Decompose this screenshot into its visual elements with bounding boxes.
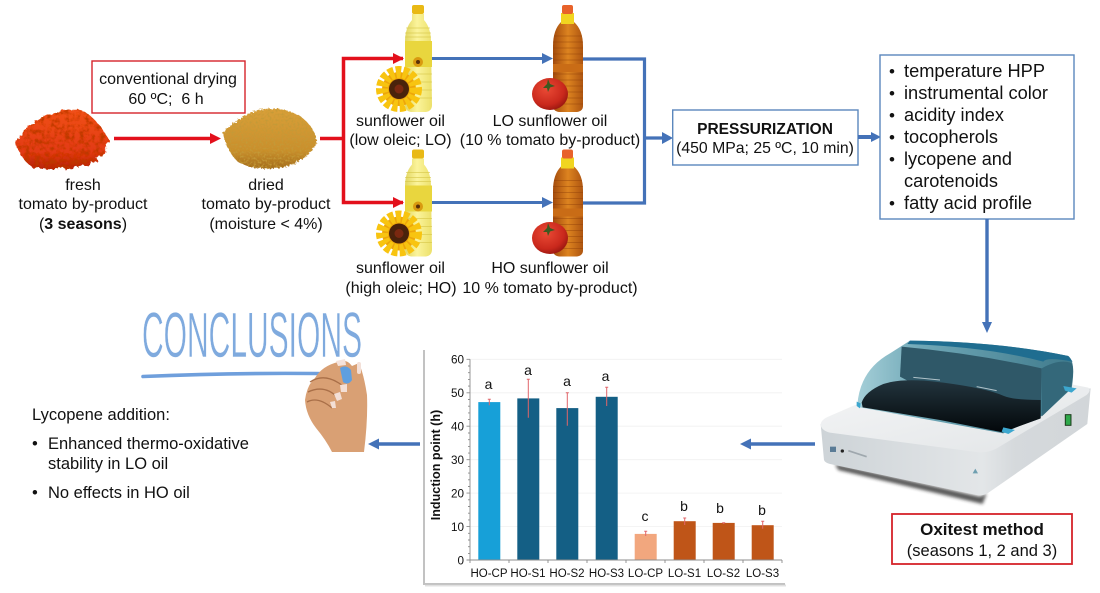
axes <box>466 359 782 563</box>
text: dried tomato by-product: dried <box>248 177 284 194</box>
text: conclusions list: No effects in HO oil <box>48 484 190 502</box>
text: HO sunflower oil <box>462 260 638 297</box>
bars: LO series <box>635 521 774 560</box>
arrow: blue bottom oil to HO <box>432 197 553 208</box>
error bars <box>488 379 764 536</box>
x category labels: HO-S2 <box>549 568 585 580</box>
box: pressurization: (450 MPa; 25 ºC, 10 min) <box>676 140 854 157</box>
box: analysis list: • <box>889 150 895 169</box>
text: dried tomato by-product <box>202 177 331 233</box>
text: conclusions list: • <box>32 484 38 502</box>
significance letters: a <box>602 368 610 384</box>
text: conclusions list <box>32 406 249 502</box>
text: conclusions list: Enhanced thermo-oxidative <box>48 435 249 453</box>
arrow: blue merge to pressurization <box>583 59 673 203</box>
box: analysis list: • <box>889 106 895 125</box>
significance letters: c <box>642 508 648 524</box>
icon: dried tomato by-product pile <box>223 108 317 169</box>
x category labels: LO-S2 <box>707 568 740 580</box>
icon: Oxitest instrument <box>821 341 1091 504</box>
label: Oxitest method: Oxitest method <box>920 520 1044 539</box>
box: analysis list: • <box>889 84 895 103</box>
text: conclusions list: stability in LO oil <box>48 455 168 473</box>
text: fresh tomato by-product: fresh <box>65 177 101 194</box>
x category labels: LO-CP <box>628 568 663 580</box>
icon: LO oil with tomato <box>532 5 583 112</box>
underline stroke <box>143 373 345 376</box>
text: fresh tomato by-product: tomato by-product <box>19 196 148 213</box>
x category labels: HO-S1 <box>510 568 546 580</box>
significance letters: a <box>563 373 571 389</box>
box: analysis list: • <box>889 62 895 81</box>
icon: low oleic sunflower oil bottle <box>382 5 432 112</box>
text: sunflower oil low oleic: (low oleic; LO) <box>349 132 452 149</box>
y tick labels: 50 <box>451 387 464 400</box>
x category labels: HO-S3 <box>589 568 624 580</box>
text: CONCLUSIONS <box>142 299 362 371</box>
text: sunflower oil low oleic <box>349 113 452 149</box>
text: dried tomato by-product: tomato by-product <box>202 196 331 213</box>
icon: fresh tomato by-product pile <box>16 110 109 169</box>
text: conclusions list: Lycopene addition: <box>32 406 170 424</box>
arrow: fresh to dried <box>114 133 221 144</box>
box: pressurization: PRESSURIZATION <box>697 121 833 138</box>
y axis title: Induction point (h) <box>429 410 443 520</box>
x category labels <box>470 568 779 580</box>
box: analysis list <box>880 55 1074 219</box>
callout: conventional drying: 60 ºC; 6 h <box>128 91 204 108</box>
y tick labels: 0 <box>457 554 464 568</box>
significance letters: b <box>716 500 724 516</box>
x category labels: HO-CP <box>470 568 508 580</box>
callout: conventional drying: conventional drying <box>99 71 237 88</box>
icon: hand with marker <box>305 359 367 452</box>
text: conclusions list: • <box>32 435 38 453</box>
text: sunflower oil high oleic: sunflower oil <box>356 260 445 277</box>
y tick labels: 10 <box>451 521 464 534</box>
label: Oxitest method: (seasons 1, 2 and 3) <box>907 542 1057 560</box>
text: LO sunflower oil: LO sunflower oil <box>493 113 607 130</box>
text: HO sunflower oil: 10 % tomato by-product) <box>462 280 638 297</box>
x category labels: LO-S3 <box>746 568 779 580</box>
y tick labels: 20 <box>451 488 464 500</box>
significance letters: b <box>758 502 766 518</box>
arrow: blue top oil to LO <box>432 53 553 64</box>
icon: high oleic sunflower oil bottle <box>382 150 432 256</box>
icon: HO oil with tomato <box>532 150 583 256</box>
text: sunflower oil low oleic: sunflower oil <box>356 113 445 130</box>
arrow: red split to sunflower oils <box>320 53 404 208</box>
callout: conventional drying <box>92 61 245 113</box>
text: sunflower oil high oleic <box>345 260 457 297</box>
arrow: chart to conclusions <box>368 438 420 450</box>
arrow: analysis to oxitest <box>982 219 992 333</box>
arrow: pressurization to analysis <box>858 132 881 142</box>
text: HO sunflower oil: HO sunflower oil <box>491 260 609 277</box>
box: analysis list: fatty acid profile <box>904 193 1032 213</box>
x category labels: LO-S1 <box>668 568 701 580</box>
box: analysis list: carotenoids <box>904 171 998 191</box>
text: fresh tomato by-product <box>19 177 148 233</box>
bar chart: induction point <box>424 350 786 586</box>
bars: HO series <box>478 397 618 560</box>
box: analysis list: • <box>889 128 895 147</box>
text: fresh tomato by-product: (3 seasons) <box>39 216 127 233</box>
y tick labels <box>451 354 464 568</box>
text: sunflower oil high oleic: (high oleic; HO) <box>345 280 457 297</box>
text: LO sunflower oil <box>460 113 640 149</box>
box: analysis list: tocopherols <box>904 127 998 147</box>
significance letters: a <box>485 376 493 392</box>
y tick labels: 40 <box>451 420 464 434</box>
box: analysis list: temperature HPP <box>904 61 1045 81</box>
y tick labels: 60 <box>451 354 464 366</box>
text: dried tomato by-product: (moisture < 4%) <box>209 216 323 233</box>
y tick labels: 30 <box>451 454 464 467</box>
box: analysis list: instrumental color <box>904 83 1048 103</box>
significance letters: a <box>524 362 532 378</box>
significance letters: b <box>680 498 688 514</box>
box: analysis list: lycopene and <box>904 149 1012 169</box>
box: pressurization <box>673 110 858 165</box>
text: LO sunflower oil: (10 % tomato by-product) <box>460 132 640 149</box>
significance letters <box>485 362 766 524</box>
box: analysis list: • <box>889 194 895 213</box>
label: Oxitest method <box>892 514 1072 564</box>
arrow: oxitest to chart <box>740 438 815 450</box>
box: analysis list: acidity index <box>904 105 1004 125</box>
